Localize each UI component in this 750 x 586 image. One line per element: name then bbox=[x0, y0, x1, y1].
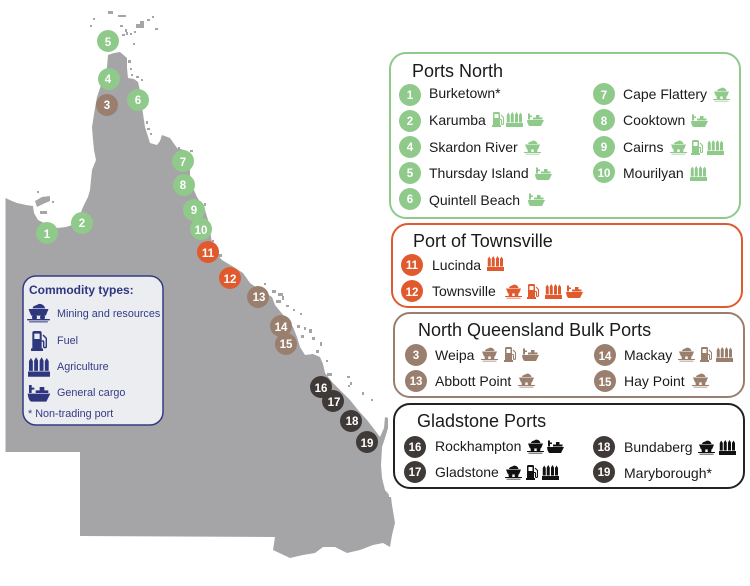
map marker: port 9: 9 bbox=[191, 205, 197, 217]
row: Rockhampton bbox=[404, 436, 564, 458]
row: Gladstone bbox=[404, 461, 559, 483]
row: Skardon River: Skardon River bbox=[429, 139, 518, 155]
map marker: port 3 bbox=[96, 94, 118, 116]
row: Burketown: Burketown* bbox=[429, 85, 501, 101]
map marker: port 18 bbox=[340, 410, 362, 432]
row: Gladstone: 17 bbox=[409, 467, 421, 479]
map marker: port 8: 8 bbox=[180, 180, 187, 192]
map marker: port 14: 14 bbox=[275, 322, 288, 334]
row: Thursday Island: Thursday Island bbox=[429, 165, 529, 181]
panel: Port of Townsville bbox=[392, 224, 742, 307]
map marker: port 9 bbox=[183, 199, 205, 221]
map marker: port 13: 13 bbox=[253, 292, 265, 304]
legend icon: mining bbox=[27, 304, 50, 322]
panel: Gladstone Ports bbox=[394, 404, 744, 488]
legend label: general cargo: General cargo bbox=[57, 387, 125, 399]
map marker: port 17 bbox=[322, 390, 344, 412]
row: Karumba: 2 bbox=[407, 116, 413, 128]
row: Mackay bbox=[594, 344, 733, 366]
legend label: fuel: Fuel bbox=[57, 335, 78, 347]
row: Mackay: 14 bbox=[599, 351, 612, 363]
map marker: port 16: 16 bbox=[315, 383, 327, 395]
map marker: port 10 bbox=[190, 218, 212, 240]
legend label: agriculture: Agriculture bbox=[57, 361, 109, 373]
row: Cape Flattery bbox=[593, 83, 730, 105]
row: Cairns bbox=[593, 136, 724, 158]
map marker: port 1: 1 bbox=[44, 229, 51, 241]
row: Townsville: 12 bbox=[406, 287, 418, 299]
legend icon: general cargo bbox=[28, 385, 50, 402]
map marker: port 6: 6 bbox=[135, 95, 141, 107]
map marker: port 7: 7 bbox=[180, 157, 186, 169]
map marker: port 12: 12 bbox=[224, 274, 236, 286]
row: Townsville bbox=[401, 280, 583, 302]
panel: North Queensland Bulk Ports bbox=[394, 313, 744, 397]
legend note: * Non-trading port bbox=[28, 408, 113, 420]
map marker: port 15: 15 bbox=[280, 339, 293, 351]
map marker: port 13 bbox=[247, 286, 269, 308]
row: Cairns: 9 bbox=[601, 142, 607, 154]
map marker: port 8 bbox=[173, 174, 195, 196]
map marker: port 5 bbox=[97, 30, 119, 52]
row: Karumba: Karumba bbox=[429, 112, 486, 128]
map marker: port 2: 2 bbox=[79, 218, 85, 230]
legend heading: Commodity types: bbox=[29, 283, 134, 297]
row: Mackay: Mackay bbox=[624, 347, 672, 363]
row: Hay Point: 15 bbox=[599, 377, 612, 389]
legend icon: agriculture bbox=[28, 357, 50, 377]
map marker: port 7 bbox=[172, 150, 194, 172]
row: Townsville: Townsville bbox=[432, 283, 496, 299]
row: Lucinda: Lucinda bbox=[432, 257, 481, 273]
map marker: port 11 bbox=[197, 241, 219, 263]
map marker: port 19 bbox=[356, 431, 378, 453]
map marker: port 3: 3 bbox=[104, 100, 110, 112]
row: Mourilyan bbox=[593, 161, 707, 183]
panel: Ports North bbox=[390, 53, 740, 218]
map marker: port 17: 17 bbox=[328, 397, 340, 409]
row: Burketown bbox=[399, 84, 501, 106]
row: Mourilyan: Mourilyan bbox=[623, 165, 684, 181]
row: Quintell Beach bbox=[399, 188, 545, 210]
heading: Port of Townsville bbox=[413, 231, 553, 251]
heading: Ports North bbox=[412, 61, 503, 81]
map marker: port 4 bbox=[98, 68, 120, 90]
row: Hay Point bbox=[594, 370, 709, 392]
row: Bundaberg: Bundaberg bbox=[624, 439, 693, 455]
row: Burketown: 1 bbox=[407, 90, 414, 102]
map marker: port 11: 11 bbox=[202, 248, 215, 260]
row: Quintell Beach: 6 bbox=[407, 194, 413, 206]
map marker: port 19: 19 bbox=[361, 438, 373, 450]
row: Cairns: Cairns bbox=[623, 139, 663, 155]
row: Rockhampton: 16 bbox=[409, 442, 421, 454]
row: Maryborough: Maryborough* bbox=[624, 465, 712, 481]
map marker: port 5: 5 bbox=[105, 37, 112, 49]
row: Cooktown: 8 bbox=[601, 116, 608, 128]
row: Lucinda: 11 bbox=[406, 260, 419, 272]
row: Bundaberg: 18 bbox=[598, 442, 611, 454]
row: Cooktown bbox=[593, 109, 708, 131]
row: Thursday Island bbox=[399, 162, 552, 184]
row: Thursday Island: 5 bbox=[407, 168, 414, 180]
row: Quintell Beach: Quintell Beach bbox=[429, 192, 520, 208]
row: Skardon River: 4 bbox=[407, 142, 414, 154]
row: Weipa: Weipa bbox=[435, 347, 475, 363]
row: Abbott Point: 13 bbox=[410, 376, 422, 388]
map marker: port 18: 18 bbox=[346, 416, 359, 428]
heading: Gladstone Ports bbox=[417, 411, 546, 431]
heading: North Queensland Bulk Ports bbox=[418, 320, 651, 340]
row: Cooktown: Cooktown bbox=[623, 112, 685, 128]
row: Abbott Point: Abbott Point bbox=[435, 373, 511, 389]
row: Mourilyan: 10 bbox=[598, 168, 610, 180]
row: Weipa bbox=[405, 344, 539, 366]
row: Abbott Point bbox=[405, 370, 535, 392]
map marker: port 6 bbox=[127, 89, 149, 111]
map marker: port 1 bbox=[36, 222, 58, 244]
map marker: port 14 bbox=[270, 315, 292, 337]
row: Cape Flattery: 7 bbox=[601, 90, 607, 102]
legend: commodity types bbox=[23, 276, 163, 425]
row: Weipa: 3 bbox=[413, 350, 419, 362]
map marker: port 15 bbox=[275, 333, 297, 355]
row: Karumba bbox=[399, 110, 544, 132]
row: Hay Point: Hay Point bbox=[624, 373, 685, 389]
map marker: port 4: 4 bbox=[105, 74, 112, 86]
row: Gladstone: Gladstone bbox=[435, 464, 499, 480]
map marker: port 10: 10 bbox=[195, 225, 207, 237]
row: Lucinda bbox=[401, 254, 504, 276]
row: Maryborough bbox=[593, 461, 712, 483]
row: Maryborough: 19 bbox=[598, 467, 610, 479]
row: Bundaberg bbox=[593, 436, 736, 458]
map marker: port 2 bbox=[71, 212, 93, 234]
map marker: port 16 bbox=[310, 376, 332, 398]
legend icon: fuel bbox=[31, 331, 46, 351]
map: Queensland landmass bbox=[6, 11, 395, 558]
row: Cape Flattery: Cape Flattery bbox=[623, 86, 707, 102]
row: Skardon River bbox=[399, 136, 541, 158]
legend label: mining: Mining and resources bbox=[57, 308, 161, 320]
row: Rockhampton: Rockhampton bbox=[435, 438, 521, 454]
map marker: port 12 bbox=[219, 267, 241, 289]
